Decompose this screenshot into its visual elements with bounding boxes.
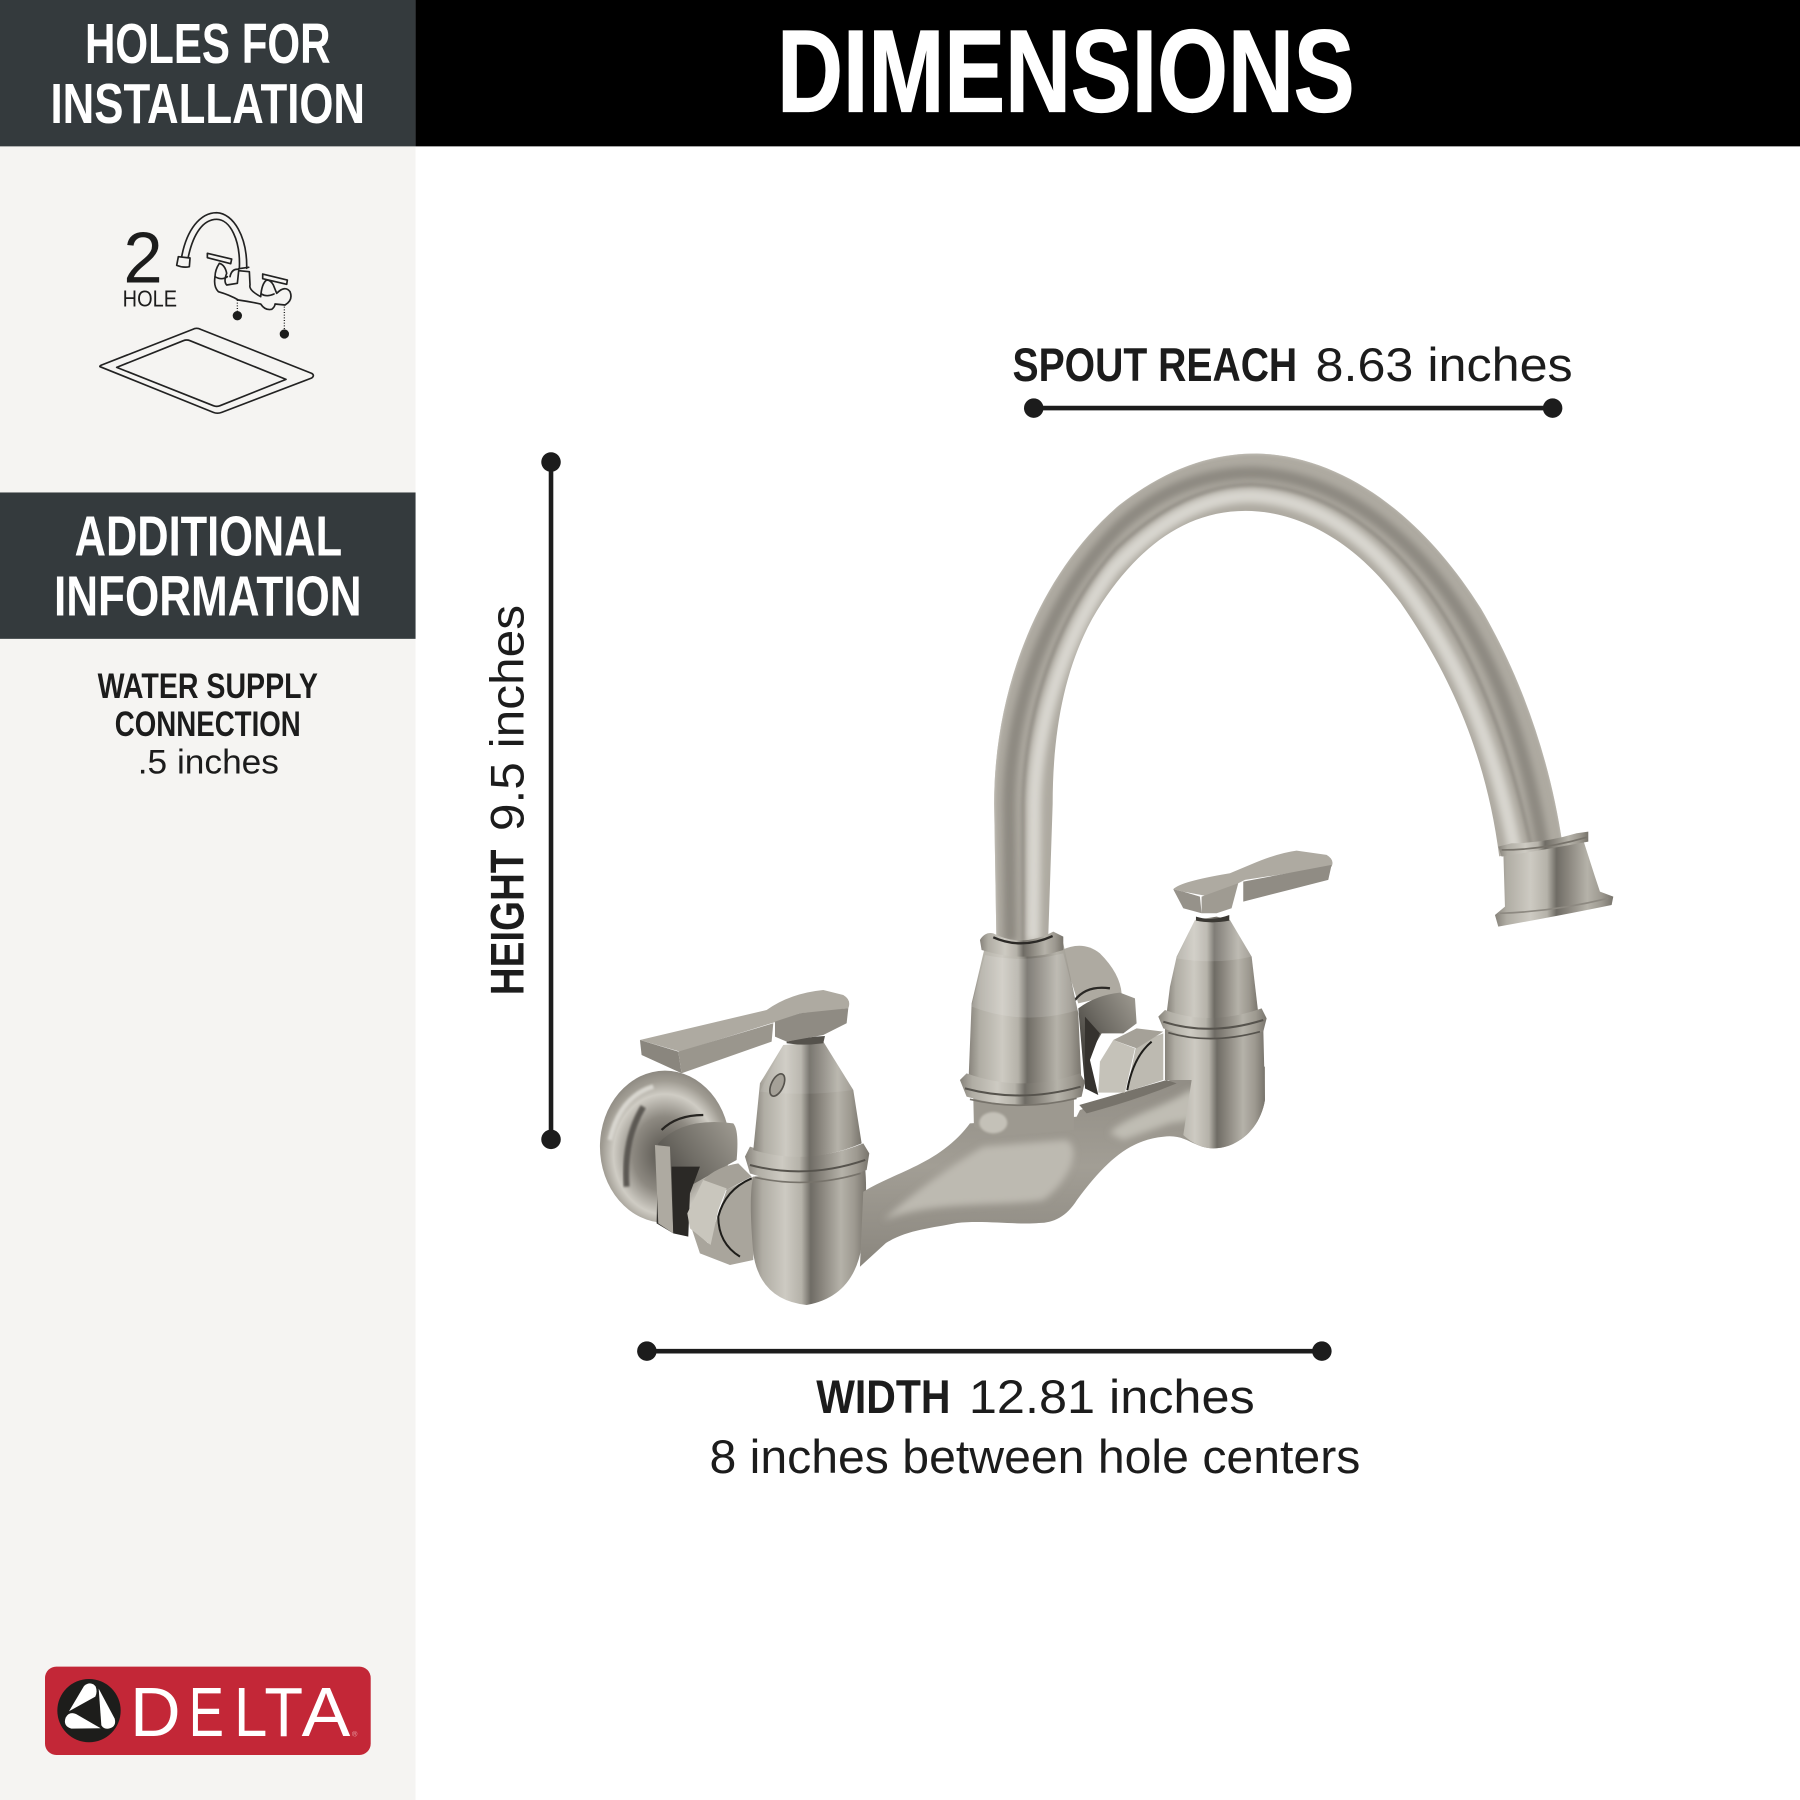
dimension: width bbox=[637, 1341, 1360, 1483]
left mounting bracket bbox=[655, 1115, 737, 1237]
faucet illustration bbox=[600, 451, 1613, 1305]
logo: Delta: L bbox=[234, 1673, 267, 1751]
icon: two hole faucet over sink: 2 bbox=[123, 217, 163, 298]
right collar bbox=[1158, 1008, 1267, 1039]
title banner: DIMENSIONS bbox=[777, 5, 1355, 136]
center neck bbox=[973, 1097, 1074, 1137]
right handle cone bbox=[1167, 915, 1258, 1023]
right lever bbox=[1173, 851, 1333, 913]
dimension: height: 9.5 inches bbox=[480, 605, 533, 831]
heading: holes for installation: INSTALLATION bbox=[51, 72, 365, 135]
heading: holes for installation bbox=[0, 0, 416, 146]
logo: Delta: T bbox=[264, 1673, 303, 1751]
logo: Delta: D bbox=[130, 1673, 181, 1751]
heading: additional information bbox=[0, 492, 416, 639]
dimension: height: HEIGHT bbox=[480, 849, 533, 995]
dimension: width: 8 inches between hole centers bbox=[709, 1430, 1360, 1483]
aerator bbox=[1495, 832, 1613, 927]
heading: additional information: ADDITIONAL bbox=[75, 505, 342, 568]
logo: Delta: E bbox=[189, 1673, 224, 1751]
right hex nut bbox=[1098, 1028, 1163, 1093]
sidebar panel bbox=[0, 0, 416, 1800]
right lower bulb bbox=[1165, 1027, 1265, 1148]
dimension: width: WIDTH bbox=[816, 1370, 951, 1423]
water supply connection text: .5 inches bbox=[138, 744, 279, 782]
connecting pipe bbox=[860, 1067, 1265, 1267]
left collar bbox=[745, 1143, 869, 1183]
title banner bbox=[416, 0, 1800, 146]
dimension: spout reach bbox=[1013, 338, 1573, 418]
right mounting bracket bbox=[1075, 988, 1137, 1095]
water supply connection text: CONNECTION bbox=[115, 704, 301, 744]
heading: additional information: INFORMATION bbox=[54, 564, 362, 627]
left lever bbox=[640, 990, 849, 1073]
dimension: spout reach: SPOUT REACH bbox=[1013, 338, 1297, 391]
left escutcheon bbox=[600, 1071, 730, 1223]
center lower collar bbox=[960, 1073, 1085, 1105]
heading: holes for installation: HOLES FOR bbox=[85, 12, 331, 75]
center cone bbox=[968, 943, 1082, 1087]
icon: two hole faucet over sink: HOLE bbox=[123, 286, 177, 312]
left handle cone bbox=[753, 1036, 862, 1157]
dimension: height bbox=[480, 452, 561, 1149]
left wall mount and handle bbox=[600, 990, 869, 1305]
logo: Delta: A bbox=[302, 1673, 351, 1751]
left lower bulb bbox=[751, 1167, 866, 1305]
left hex nut bbox=[687, 1163, 753, 1265]
logo: Delta: ® bbox=[352, 1730, 358, 1739]
spout arch bbox=[992, 451, 1565, 941]
center body and right wall mount bbox=[860, 915, 1267, 1267]
dimension: spout reach: 8.63 inches bbox=[1316, 338, 1573, 391]
center top collar bbox=[980, 932, 1063, 957]
water supply connection text: WATER SUPPLY bbox=[98, 666, 318, 706]
icon: two hole faucet over sink bbox=[100, 213, 313, 413]
right escutcheon bbox=[1062, 946, 1122, 1003]
dimension: width: 12.81 inches bbox=[969, 1370, 1255, 1423]
logo: Delta bbox=[45, 1667, 371, 1755]
water supply connection text bbox=[98, 666, 318, 782]
